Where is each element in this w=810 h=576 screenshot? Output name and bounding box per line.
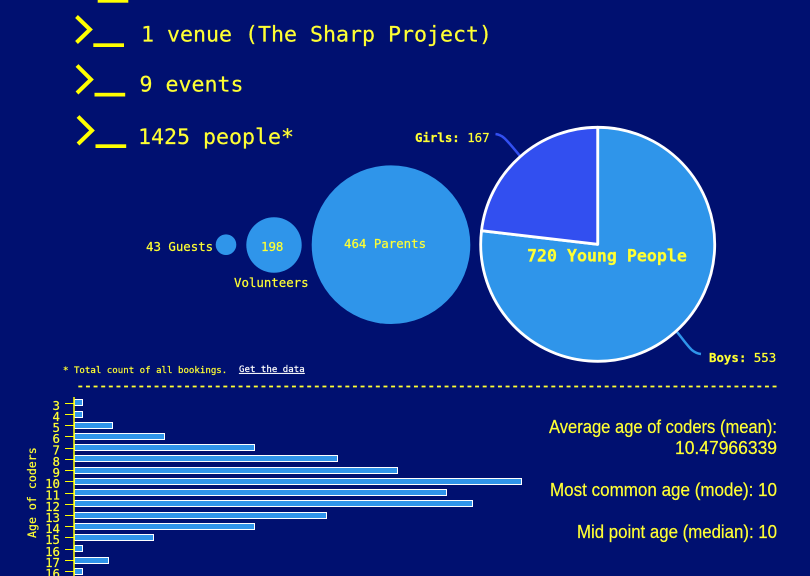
pie label: 720 Young People: [527, 246, 687, 266]
label: girls: Girls: 167: [415, 130, 490, 145]
pie chart: young people: [481, 127, 715, 361]
age labels: 9: [53, 465, 60, 480]
stat: 9 events: 9 events: [140, 72, 244, 98]
stats: age averages: [549, 417, 777, 542]
age labels: 6: [53, 431, 60, 446]
stat: 1425 people: 1425 people*: [138, 125, 294, 150]
age labels: 4: [53, 409, 60, 424]
bubble: guests: 43 Guests: [146, 239, 213, 254]
age labels: 7: [53, 442, 60, 458]
stat: 9 events: [77, 66, 244, 98]
stat: 1 venue: 1 venue (The Sharp Project): [141, 22, 492, 48]
leader: boys: [677, 332, 701, 354]
age labels: 3: [53, 398, 60, 413]
stat: 1425 people: [78, 116, 294, 150]
age labels: 10: [45, 476, 60, 491]
bubble: parents: [312, 165, 470, 324]
stat: 1 venue: [76, 16, 492, 48]
icon: terminal prompt cut off at top: [78, 0, 128, 3]
age labels: 14: [45, 521, 60, 536]
age labels: 12: [45, 499, 60, 514]
bubble: parents: 464 Parents: [344, 236, 426, 251]
age labels: [45, 398, 60, 576]
bubble: volunteers: 198: [261, 239, 283, 254]
median: Mid point age (median): 10: [577, 522, 777, 542]
age labels: 13: [45, 510, 60, 525]
mean: [549, 417, 777, 458]
age labels: 5: [53, 420, 60, 435]
age labels: 17: [45, 555, 60, 570]
bars: [74, 400, 522, 574]
mean: Average age of coders (mean):: [549, 417, 777, 437]
axis and ticks: [65, 397, 74, 576]
age labels: 11: [45, 488, 60, 502]
bubble: volunteers: [234, 217, 309, 290]
bubble: guests: [146, 234, 236, 255]
bar chart: age of coders: [25, 397, 522, 576]
age labels: 16: [45, 544, 60, 559]
bubble: volunteers: Volunteers: [234, 275, 309, 290]
age labels: 8: [53, 454, 60, 469]
axis title: Age of coders: [25, 447, 39, 538]
age labels: 15: [45, 532, 60, 547]
mode: Most common age (mode): 10: [550, 480, 777, 500]
leader: girls: [496, 134, 520, 156]
link: get the data: Get the data: [239, 365, 305, 375]
label: boys: Boys: 553: [709, 350, 776, 365]
mean: 10.47966339: [675, 438, 777, 458]
slice: girls: [482, 127, 598, 244]
footnote: * Total count of all bookings.: [63, 366, 227, 376]
dashed divider: --------------------------------------------------------------------------------------------: [76, 378, 778, 393]
slice: boys: [481, 127, 715, 361]
